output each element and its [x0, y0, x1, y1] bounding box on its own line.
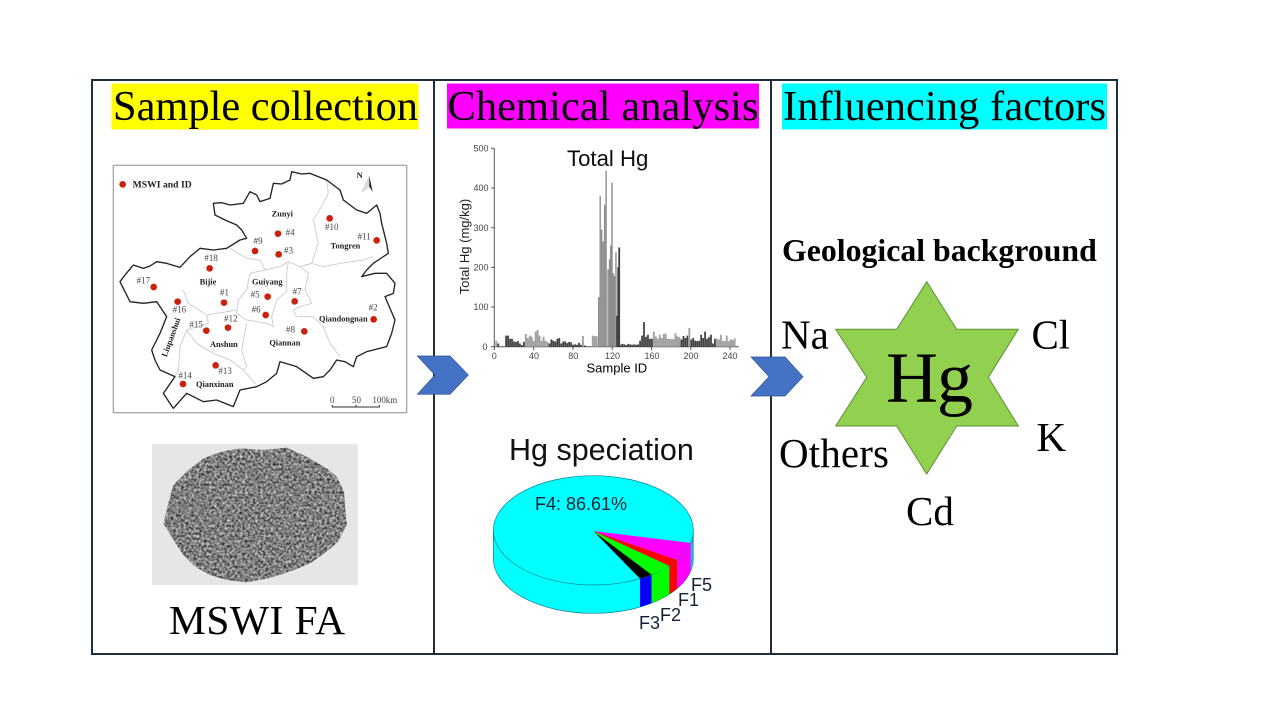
- pie: coloured wall segments: [640, 530, 693, 607]
- map: district names: Anshun: [210, 340, 238, 349]
- pie: top slices: [593, 531, 691, 579]
- pie labels: F3: [639, 613, 660, 633]
- map: site numbers: #10: [325, 222, 339, 232]
- map: site numbers: #4: [286, 227, 295, 237]
- 3D pie chart: [493, 476, 693, 613]
- panel: influencing factors: [779, 83, 1107, 534]
- x axis with ticks: 40: [529, 351, 539, 361]
- y axis with ticks: [457, 144, 739, 352]
- y axis with ticks: Total Hg (mg/kg): [457, 199, 472, 294]
- map: province outline: [120, 172, 395, 408]
- map: district names: Bijie: [200, 278, 217, 287]
- star with Hg: Hg: [886, 338, 973, 418]
- chart title: Hg speciation: Hg speciation: [509, 433, 694, 467]
- map: inner district borders: [175, 180, 373, 385]
- star with Hg: [836, 282, 1018, 474]
- x axis with ticks: 240: [722, 351, 738, 361]
- x axis with ticks: 0: [492, 351, 497, 361]
- caption: MSWI FA: MSWI FA: [169, 597, 345, 643]
- chart title: Total Hg: [567, 146, 648, 171]
- map: site numbers: #8: [286, 325, 295, 335]
- subheading: geological background: Geological background: [782, 233, 1097, 268]
- map: site numbers: #18: [204, 253, 218, 263]
- map: scale bar: 50: [352, 395, 361, 405]
- x axis with ticks: 120: [605, 351, 620, 361]
- map of sampling sites: [113, 165, 407, 413]
- map: site numbers: #15: [189, 319, 203, 329]
- heading: influencing factors: Influencing factors: [783, 83, 1106, 130]
- map: site numbers: #14: [178, 370, 192, 380]
- map: site numbers: #9: [254, 236, 263, 246]
- y axis with ticks: 100: [473, 302, 489, 312]
- element labels: [779, 312, 1070, 534]
- element labels: Others: [779, 430, 889, 476]
- map: district names: [133, 180, 368, 389]
- map: site numbers: #17: [137, 276, 151, 286]
- map: scale bar: 100km: [372, 395, 397, 405]
- map: district names: Liupanshui: [160, 316, 183, 358]
- map: site numbers: #1: [220, 287, 229, 297]
- x axis with ticks: 160: [644, 351, 660, 361]
- map: district names: Qiandongnan: [319, 314, 368, 323]
- pie labels: F5: [691, 575, 712, 595]
- map: district names: Tongren: [331, 242, 361, 251]
- map: site numbers: [137, 222, 378, 380]
- y axis with ticks: 0: [482, 342, 488, 352]
- heading: sample collection: Sample collection: [113, 83, 418, 130]
- x axis with ticks: 80: [568, 351, 578, 361]
- bar chart: total Hg: [457, 144, 739, 376]
- arrow: analysis to factors: [751, 357, 803, 396]
- map: site markers: [119, 181, 380, 387]
- pie labels: F1: [678, 590, 699, 610]
- y axis with ticks: 500: [473, 144, 489, 154]
- panel: sample collection: [112, 83, 418, 643]
- element labels: Cl: [1032, 312, 1070, 358]
- map: scale bar: [330, 395, 397, 407]
- y axis with ticks: 200: [473, 262, 489, 272]
- pie: side wall: [493, 530, 693, 613]
- x axis with ticks: Sample ID: [586, 360, 647, 376]
- bars: [496, 171, 735, 347]
- x axis with ticks: [492, 347, 738, 376]
- element labels: Na: [781, 312, 829, 358]
- map: district names: Qianxinan: [196, 380, 234, 389]
- pie labels: [535, 494, 712, 633]
- x axis with ticks: 200: [683, 351, 699, 361]
- outer frame with column dividers: [92, 80, 1117, 654]
- panel: chemical analysis: [447, 83, 759, 633]
- map: site numbers: #13: [218, 366, 232, 376]
- y axis with ticks: 300: [473, 223, 489, 233]
- pie: top face: [493, 476, 693, 585]
- map: district names: Guiyang: [252, 277, 283, 286]
- map: site numbers: #16: [173, 305, 187, 315]
- pie labels: F2: [660, 605, 681, 625]
- map: site numbers: #2: [369, 303, 378, 313]
- map: district names: MSWI and ID: [133, 180, 192, 191]
- map: district names: Qiannan: [269, 338, 301, 347]
- map: site numbers: #5: [251, 289, 260, 299]
- heading: chemical analysis: Chemical analysis: [448, 83, 758, 130]
- pie labels: F4: 86.61%: [535, 494, 627, 514]
- map: site numbers: #12: [224, 313, 237, 323]
- map: site numbers: #7: [293, 287, 302, 297]
- element labels: Cd: [906, 488, 954, 534]
- photo: fly ash sample: [152, 444, 358, 585]
- map: site numbers: #3: [284, 245, 293, 255]
- map: site numbers: #6: [252, 305, 261, 315]
- map: site numbers: #11: [358, 232, 371, 242]
- map: north arrow: N: [357, 171, 363, 180]
- arrow: collection to analysis: [417, 356, 468, 394]
- y axis with ticks: 400: [473, 183, 489, 193]
- element labels: K: [1036, 414, 1066, 460]
- map: north arrow: [357, 171, 373, 192]
- map: district names: Zunyi: [272, 210, 294, 219]
- map: scale bar: 0: [330, 395, 335, 405]
